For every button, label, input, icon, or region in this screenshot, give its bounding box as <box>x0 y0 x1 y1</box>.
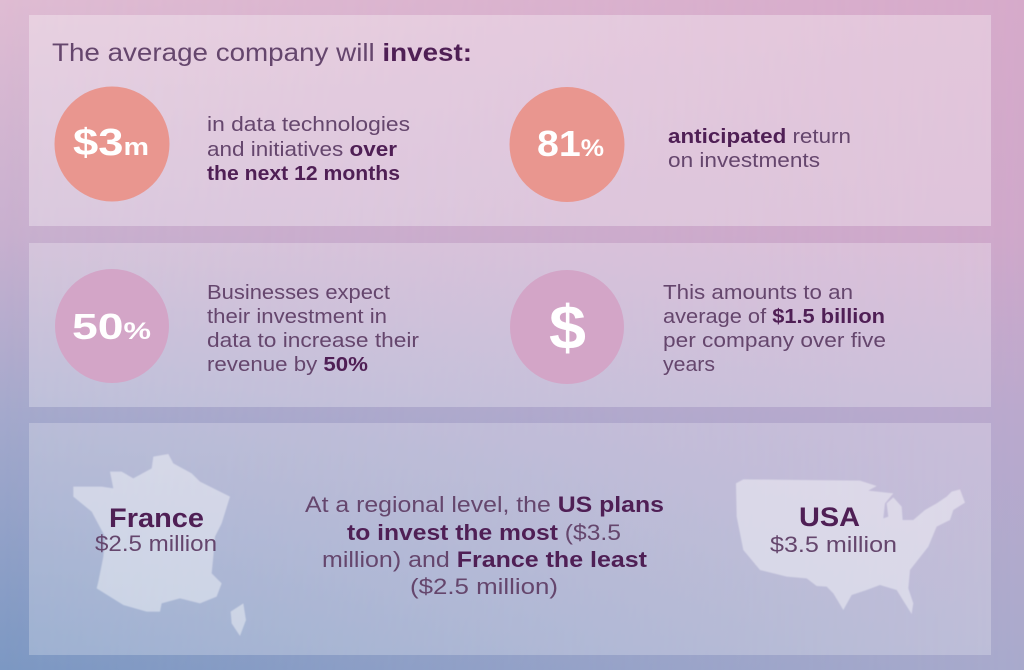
stat: 50% <box>55 269 169 383</box>
text: regional summary: to invest the most ($3.5 <box>347 520 621 545</box>
text: $1.5 billion: This amounts to an <box>663 282 853 304</box>
text: revenue by 50%: Businesses expect <box>207 282 390 304</box>
panel: average investment <box>29 15 991 226</box>
text: anticipated return <box>668 126 851 172</box>
text: data technologies: and initiatives over <box>207 139 397 161</box>
label: France: $2.5 million <box>95 531 217 556</box>
text: $1.5 billion: years <box>663 354 715 376</box>
label: USA: USA <box>799 502 860 532</box>
label: France <box>95 503 217 556</box>
text: regional summary: million) and France the least <box>322 547 648 572</box>
text: $1.5 billion: average of $1.5 billion <box>663 306 885 328</box>
text: revenue by 50%: data to increase their <box>207 330 419 352</box>
text: regional summary <box>305 492 664 599</box>
label: USA <box>770 502 897 557</box>
text: revenue by 50%: their investment in <box>207 306 387 328</box>
stat: 81%: 81% <box>537 123 604 164</box>
text: anticipated return: anticipated return <box>668 126 851 148</box>
map: USA <box>736 479 965 614</box>
panel: revenue expectations <box>29 243 991 407</box>
stat: 81% <box>510 87 624 202</box>
text: revenue by 50%: revenue by 50% <box>207 354 368 376</box>
text: anticipated return: on investments <box>668 150 820 172</box>
panel: regional <box>29 423 991 655</box>
title: The average company will invest: <box>52 39 472 67</box>
text: regional summary: At a regional level, the US plans <box>305 492 664 517</box>
map: France <box>73 454 246 636</box>
label: USA: $3.5 million <box>770 532 897 557</box>
text: data technologies: in data technologies <box>207 114 410 136</box>
icon: dollar: $ <box>549 294 586 363</box>
stat: $3m: $3 m <box>73 122 149 164</box>
stat: $3m <box>54 86 170 202</box>
text: revenue by 50% <box>207 282 419 376</box>
text: $1.5 billion <box>663 282 886 376</box>
icon: dollar <box>510 270 624 384</box>
text: $1.5 billion: per company over five <box>663 330 886 352</box>
text: data technologies: the next 12 months <box>207 163 400 185</box>
stat: 50%: 50 % <box>72 306 151 347</box>
text: data technologies <box>207 114 410 185</box>
text: regional summary: ($2.5 million) <box>410 574 558 599</box>
label: France: France <box>109 503 204 533</box>
